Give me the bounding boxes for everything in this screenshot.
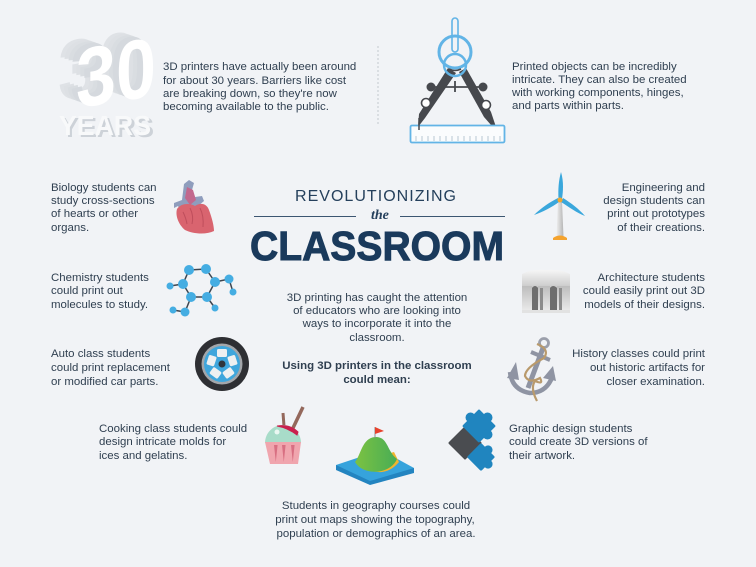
text: using 3D printers: Using 3D printers in the classroom <box>282 360 472 372</box>
text: 30 years history: are breaking down, so they're now <box>163 88 338 100</box>
text: using 3D printers: could mean: <box>343 374 411 386</box>
text: intricate objects: with working components, hinges, <box>511 87 684 99</box>
text: cooking class: Cooking class students could <box>99 423 247 435</box>
title: REVOLUTIONIZING <box>295 188 456 205</box>
text: 30 years history: becoming available to the public. <box>163 101 329 113</box>
icon: car tire <box>195 337 249 391</box>
text: engineering: Engineering and <box>622 182 705 194</box>
icon: 30 years: 30 <box>62 13 142 120</box>
text: history: History classes could print <box>572 348 706 360</box>
text: auto class: or modified car parts. <box>51 376 158 388</box>
text: 30 years history: 3D printers have actually been around <box>163 61 356 73</box>
text: chemistry: could print out <box>51 285 124 297</box>
icon: anchor <box>507 338 556 401</box>
text: central paragraph: ways to incorporate it into the <box>302 318 451 330</box>
text: chemistry: Chemistry students <box>51 272 149 284</box>
text: biology: Biology students can <box>51 182 157 194</box>
icon: compass and ruler <box>410 18 504 142</box>
icon: island map <box>336 427 414 485</box>
icon: 30 years: 30 <box>70 16 150 123</box>
text: graphic design: could create 3D versions of <box>509 436 648 448</box>
icon: 30 years: 30 <box>66 14 146 121</box>
icon: 30 years: 30 <box>76 19 156 126</box>
icon: architecture columns <box>522 270 570 313</box>
text: architecture: Architecture students <box>598 272 705 284</box>
icon: molecule <box>166 264 236 316</box>
text: history: closer examination. <box>606 376 705 388</box>
text: cooking class: ices and gelatins. <box>99 450 187 462</box>
text: geography: print out maps showing the topography, <box>275 514 475 526</box>
icon: 30 years: YEARS <box>61 112 154 143</box>
text: architecture: models of their designs. <box>584 299 705 311</box>
text: 30 years history: for about 30 years. Barriers like cost <box>163 75 347 87</box>
text: chemistry: molecules to study. <box>51 299 148 311</box>
text: auto class: Auto class students <box>51 348 150 360</box>
text: graphic design: their artwork. <box>509 450 575 462</box>
title: CLASSROOM <box>250 223 504 269</box>
text: central paragraph: classroom. <box>349 332 405 344</box>
text: cooking class: design intricate molds for <box>99 436 226 448</box>
icon: puzzle pieces <box>448 402 503 474</box>
text: geography: population or demographics of an area. <box>276 528 476 540</box>
icon: heart <box>174 180 214 234</box>
text: architecture: could easily print out 3D <box>583 285 705 297</box>
icon: cupcake <box>265 407 303 464</box>
text: graphic design: Graphic design students <box>509 423 633 435</box>
text: biology: study cross-sections <box>51 195 155 207</box>
title: the <box>371 208 389 223</box>
text: intricate objects: and parts within parts. <box>512 100 624 112</box>
text: central paragraph: 3D printing has caught the attention <box>287 292 467 304</box>
title <box>250 188 505 269</box>
text: engineering: print out prototypes <box>607 208 705 220</box>
text: engineering: design students can <box>603 195 705 207</box>
text: intricate objects: Printed objects can be incredibly <box>512 61 677 73</box>
text: biology: of hearts or other <box>51 208 138 220</box>
icon: 30 years: 30 <box>58 12 138 119</box>
text: geography: Students in geography courses could <box>282 500 470 512</box>
text: biology: organs. <box>51 222 89 234</box>
text: history: out historic artifacts for <box>590 362 705 374</box>
text: auto class: could print replacement <box>51 362 171 374</box>
text: engineering: of their creations. <box>617 222 705 234</box>
text: intricate objects: intricate. They can also be created <box>512 74 687 86</box>
text: central paragraph: of educators who are looking into <box>293 305 461 317</box>
icon: wind turbine <box>534 172 585 240</box>
icon: 30 years: YEARS <box>59 110 151 141</box>
